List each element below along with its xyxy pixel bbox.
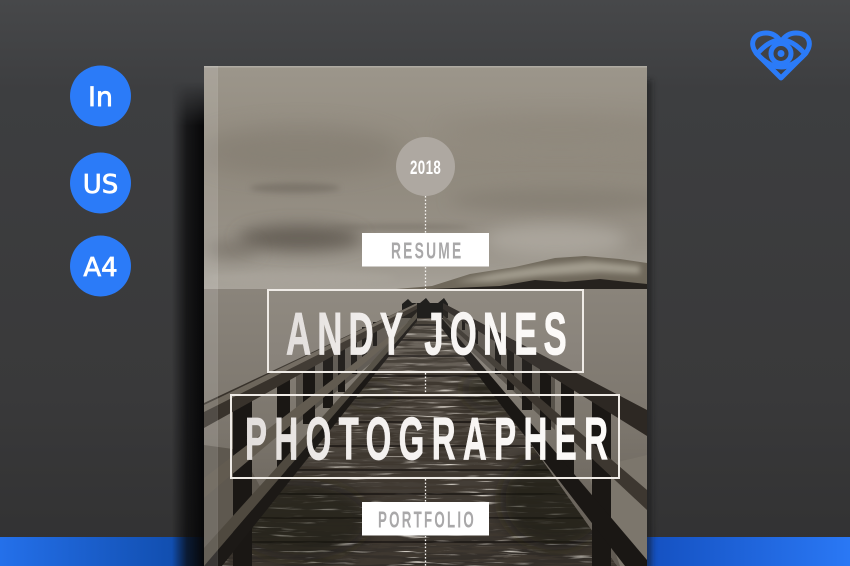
photo: right shore [590,455,647,566]
badge: US: US [83,170,118,200]
photo: sky with clouds [200,66,680,290]
resume label [362,233,489,266]
book cover [200,66,680,566]
portfolio label: PORTFOLIO [378,507,474,532]
photo: pier deck [220,310,617,566]
photo: right railing [437,303,647,566]
spine highlight [204,66,647,566]
dotted centre timeline [424,196,426,566]
name box: ANDY JONES [286,302,567,368]
portfolio label [362,502,489,536]
badge: US [70,152,131,214]
photo: water [204,289,647,566]
year circle [396,137,455,196]
badge: A4: A4 [83,253,118,283]
blue band along the bottom [0,537,850,566]
job title box: PHOTOGRAPHER [245,406,608,473]
photo: pier far end [402,298,448,318]
badge: In: In [88,82,113,113]
badge: In [70,66,131,126]
photo: deck wood grain [222,318,616,566]
icon: heart with eye logo [753,33,809,78]
year circle: 2018 [410,158,441,179]
badge: A4 [70,236,131,296]
resume label: RESUME [391,239,461,265]
photo: left railing [204,303,417,566]
photo: left shore [204,445,260,532]
photo: distant hill [396,256,647,290]
book shadow [172,80,652,566]
